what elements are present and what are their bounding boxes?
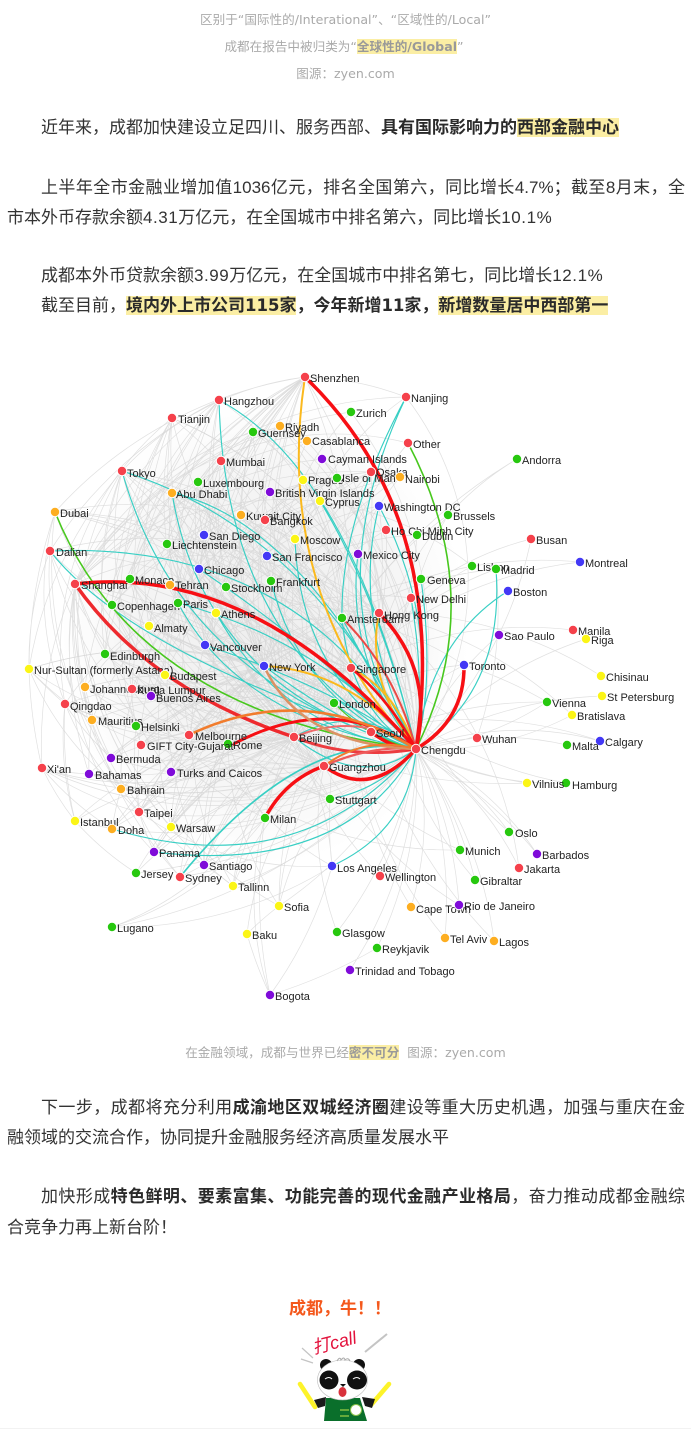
node: Nairobi (395, 472, 440, 486)
node: Dalian: Dalian (56, 547, 87, 559)
paragraph: value added line 1: 上半年全市金融业增加值1036亿元，排名全国第六，同比增长4.7%；截至8月末，全 (41, 178, 685, 197)
node: Copenhagen: Copenhagen (117, 601, 180, 613)
node: Qingdao: Qingdao (70, 701, 112, 713)
node: Hong Kong: Hong Kong (384, 610, 439, 622)
node: Doha: Doha (118, 825, 145, 837)
node: Sofia (274, 901, 310, 914)
node: Brussels: Brussels (453, 511, 496, 523)
node: Bratislava: Bratislava (577, 711, 626, 723)
node: British Virgin Islands: British Virgin Islands (275, 488, 375, 500)
node: Trinidad and Tobago: Trinidad and Tobago (355, 966, 455, 978)
node: Barbados: Barbados (542, 850, 590, 862)
node: Almaty (144, 621, 188, 635)
panda body (314, 1397, 375, 1421)
node: Tianjin: Tianjin (178, 414, 210, 426)
network chart: global financial city connections (24, 372, 674, 1003)
node: St Petersburg: St Petersburg (607, 692, 674, 704)
text: call: 打call (310, 1327, 360, 1358)
node: Riga: Riga (591, 635, 615, 647)
node: Madrid: Madrid (501, 565, 535, 577)
node: Vilnius: Vilnius (532, 779, 565, 791)
node: Paris: Paris (183, 599, 209, 611)
gold connection lines (264, 377, 416, 749)
node: Taipei: Taipei (144, 808, 173, 820)
node: Isle of Man: Isle of Man (342, 473, 396, 485)
node: Doha (107, 824, 145, 837)
node: Moscow: Moscow (300, 535, 340, 547)
node: Mumbai: Mumbai (226, 457, 265, 469)
node: Baku (242, 929, 277, 942)
paragraph: value added line 2: 市本外币存款余额4.31万亿元，在全国城市中排名第六，同比增长10.1% (7, 208, 552, 227)
node: Dublin: Dublin (422, 531, 453, 543)
node: Sofia: Sofia (284, 902, 310, 914)
node: Wuhan: Wuhan (482, 734, 517, 746)
node: Ho Chi Minh City: Ho Chi Minh City (391, 526, 474, 538)
node: Milan (260, 813, 296, 826)
node: Johannesburg: Johannesburg (90, 684, 160, 696)
node: Almaty: Almaty (154, 623, 188, 635)
node: Nur-Sultan: Nur-Sultan (formerly Astana) (34, 665, 173, 677)
node: Geneva: Geneva (427, 575, 466, 587)
node: Istanbul: Istanbul (80, 817, 119, 829)
node: Rio de Janeiro: Rio de Janeiro (464, 901, 535, 913)
node: Liechtenstein: Liechtenstein (172, 540, 237, 552)
node: Milan: Milan (270, 814, 296, 826)
node: Turks and Caicos: Turks and Caicos (177, 768, 263, 780)
node: Bogota: Bogota (275, 991, 311, 1003)
node: Mauritius: Mauritius (98, 716, 143, 728)
paragraph: modern finance line 1: 加快形成特色鲜明、要素富集、功能完善的现代金融产业格局，奋力推动成都金融综 (41, 1187, 685, 1206)
glow sticks (300, 1384, 389, 1407)
node: Guangzhou: Guangzhou (329, 762, 386, 774)
city nodes (24, 372, 674, 1003)
node: Cayman Islands: Cayman Islands (328, 454, 407, 466)
node: San Diego: San Diego (209, 531, 260, 543)
node: Toronto: Toronto (469, 661, 506, 673)
node: New York: New York (269, 662, 316, 674)
closing slogan: 成都，牛！！ (289, 1299, 391, 1318)
node: Prague: Prague (308, 475, 343, 487)
node: Santiago: Santiago (209, 861, 252, 873)
node: Bahrain: Bahrain (127, 785, 165, 797)
node: Lisbon: Lisbon (477, 562, 509, 574)
node: Mexico City: Mexico City (363, 550, 420, 562)
node: Wellington: Wellington (385, 872, 436, 884)
node: Melbourne: Melbourne (195, 731, 247, 743)
node: Hangzhou: Hangzhou (224, 396, 274, 408)
node: Tokyo: Tokyo (127, 468, 156, 480)
node: Boston: Boston (513, 587, 547, 599)
gray connection lines (29, 377, 602, 995)
node: Malta (562, 740, 600, 753)
node: Montreal: Montreal (585, 558, 628, 570)
node: Cyprus: Cyprus (325, 497, 360, 509)
node: Athens: Athens (221, 609, 256, 621)
node: Paris (173, 598, 209, 611)
node: GIFT City-Gujarat: GIFT City-Gujarat (147, 741, 234, 753)
node: Tallinn: Tallinn (238, 882, 269, 894)
node: Riga (581, 634, 615, 647)
node: Seoul: Seoul (376, 728, 404, 740)
gray connection cloud (60, 395, 470, 865)
node: Zurich: Zurich (356, 408, 387, 420)
node: Oslo (504, 827, 538, 840)
node: Rome: Rome (233, 740, 262, 752)
paragraph: next step line 2: 融领域的交流合作，协同提升金融服务经济高质量发展水平 (7, 1128, 449, 1147)
node: Los Angeles: Los Angeles (337, 863, 397, 875)
node: Edinburgh: Edinburgh (110, 651, 160, 663)
node: Singapore: Singapore (356, 664, 406, 676)
node: Shenzhen: Shenzhen (310, 373, 360, 385)
node: Chengdu: Chengdu (421, 745, 466, 757)
node: Sydney: Sydney (185, 873, 222, 885)
node: Warsaw: Warsaw (176, 823, 215, 835)
node: Panama: Panama (159, 848, 201, 860)
node: Kuwait City: Kuwait City (246, 511, 302, 523)
node: Malta: Malta (572, 741, 600, 753)
node: Gibraltar: Gibraltar (480, 876, 523, 888)
node: Stockholm: Stockholm (231, 583, 282, 595)
node: Stuttgart: Stuttgart (335, 795, 377, 807)
node: Guernsey: Guernsey (258, 428, 306, 440)
node: Busan: Busan (536, 535, 567, 547)
node: Glasgow: Glasgow (342, 928, 385, 940)
node: Cape Town: Cape Town (416, 904, 471, 916)
paragraph: listed companies: 截至目前，境内外上市公司115家，今年新增11家，新增数量居中西部第一 (41, 296, 608, 315)
caption: classification line 2: 成都在报告中被归类为“全球性的/Global” (224, 39, 464, 54)
node: Nanjing: Nanjing (411, 393, 448, 405)
cheer strokes (301, 1334, 387, 1363)
node: Bermuda: Bermuda (116, 754, 162, 766)
node: Lagos: Lagos (499, 937, 529, 949)
node: Xi'an: Xi'an (47, 764, 71, 776)
node: Hamburg: Hamburg (572, 780, 617, 792)
node: Luxembourg: Luxembourg (203, 478, 264, 490)
orange connection lines (189, 666, 416, 766)
node: Beijing: Beijing (299, 733, 332, 745)
node: Monaco: Monaco (135, 575, 174, 587)
node: Xi'an (37, 763, 71, 776)
node: Reykjavik: Reykjavik (382, 944, 430, 956)
node: Washington DC: Washington DC (384, 502, 461, 514)
node: Shanghai: Shanghai (81, 580, 128, 592)
node: Nairobi: Nairobi (405, 474, 440, 486)
paragraph: next step line 1: 下一步，成都将充分利用成渝地区双城经济圈建设等重大历史机遇，加强与重庆在金 (41, 1098, 685, 1117)
node: Abu Dhabi: Abu Dhabi (176, 489, 227, 501)
node: Tokyo (117, 466, 156, 480)
node: Amsterdam: Amsterdam (347, 614, 403, 626)
paragraph: modern finance line 2: 合竞争力再上新台阶！ (7, 1218, 177, 1237)
node: Other: Other (413, 439, 441, 451)
node: Casablanca: Casablanca (312, 436, 371, 448)
node: Helsinki: Helsinki (141, 722, 180, 734)
node: Other (403, 438, 441, 451)
node: Vienna: Vienna (552, 698, 587, 710)
node: Sao Paulo: Sao Paulo (504, 631, 555, 643)
node: Jersey: Jersey (141, 869, 174, 881)
node: Budapest: Budapest (170, 671, 216, 683)
node: Buenos Aires: Buenos Aires (156, 693, 221, 705)
node: Chicago: Chicago (204, 565, 244, 577)
node: Baku: Baku (252, 930, 277, 942)
node: Frankfurt: Frankfurt (276, 577, 320, 589)
node: Munich: Munich (465, 846, 500, 858)
paragraph: loans: 成都本外币贷款余额3.99万亿元，在全国城市中排名第七，同比增长12.1% (41, 266, 603, 285)
red connection lines (75, 377, 464, 818)
caption: image source: 图源：zyen.com (296, 66, 395, 81)
node: Jakarta: Jakarta (524, 864, 561, 876)
node: Tehran: Tehran (175, 580, 209, 592)
node: Kuala Lumpur: Kuala Lumpur (137, 685, 206, 697)
node: Osaka: Osaka (376, 467, 409, 479)
node: Bahamas: Bahamas (95, 770, 142, 782)
node: Riyadh: Riyadh (285, 422, 319, 434)
caption: classification line 1: 区别于“国际性的/Interational”、“区域性的/Local” (200, 12, 491, 27)
icon: panda cheering (0, 1327, 691, 1429)
caption: chart: 在金融领域，成都与世界已经密不可分 图源：zyen.com (185, 1045, 506, 1060)
node: New Delhi: New Delhi (416, 594, 466, 606)
node: Manila: Manila (578, 626, 611, 638)
panda head (318, 1358, 368, 1400)
node: Chisinau: Chisinau (606, 672, 649, 684)
node: Tel Aviv: Tel Aviv (450, 934, 488, 946)
node: Andorra: Andorra (522, 455, 562, 467)
node: Vancouver: Vancouver (210, 642, 262, 654)
node: Lugano: Lugano (117, 923, 154, 935)
node: San Francisco: San Francisco (272, 552, 342, 564)
node: Calgary: Calgary (605, 737, 643, 749)
node: Oslo: Oslo (515, 828, 538, 840)
node: Bangkok: Bangkok (270, 516, 313, 528)
node: London: London (339, 699, 376, 711)
cyan connection lines (50, 397, 508, 877)
green connection lines (55, 443, 451, 749)
node: Dubai: Dubai (60, 508, 89, 520)
divider line (0, 1428, 691, 1429)
paragraph: financial center: 近年来，成都加快建设立足四川、服务西部、具有国际影响力的西部金融中心 (41, 118, 619, 137)
